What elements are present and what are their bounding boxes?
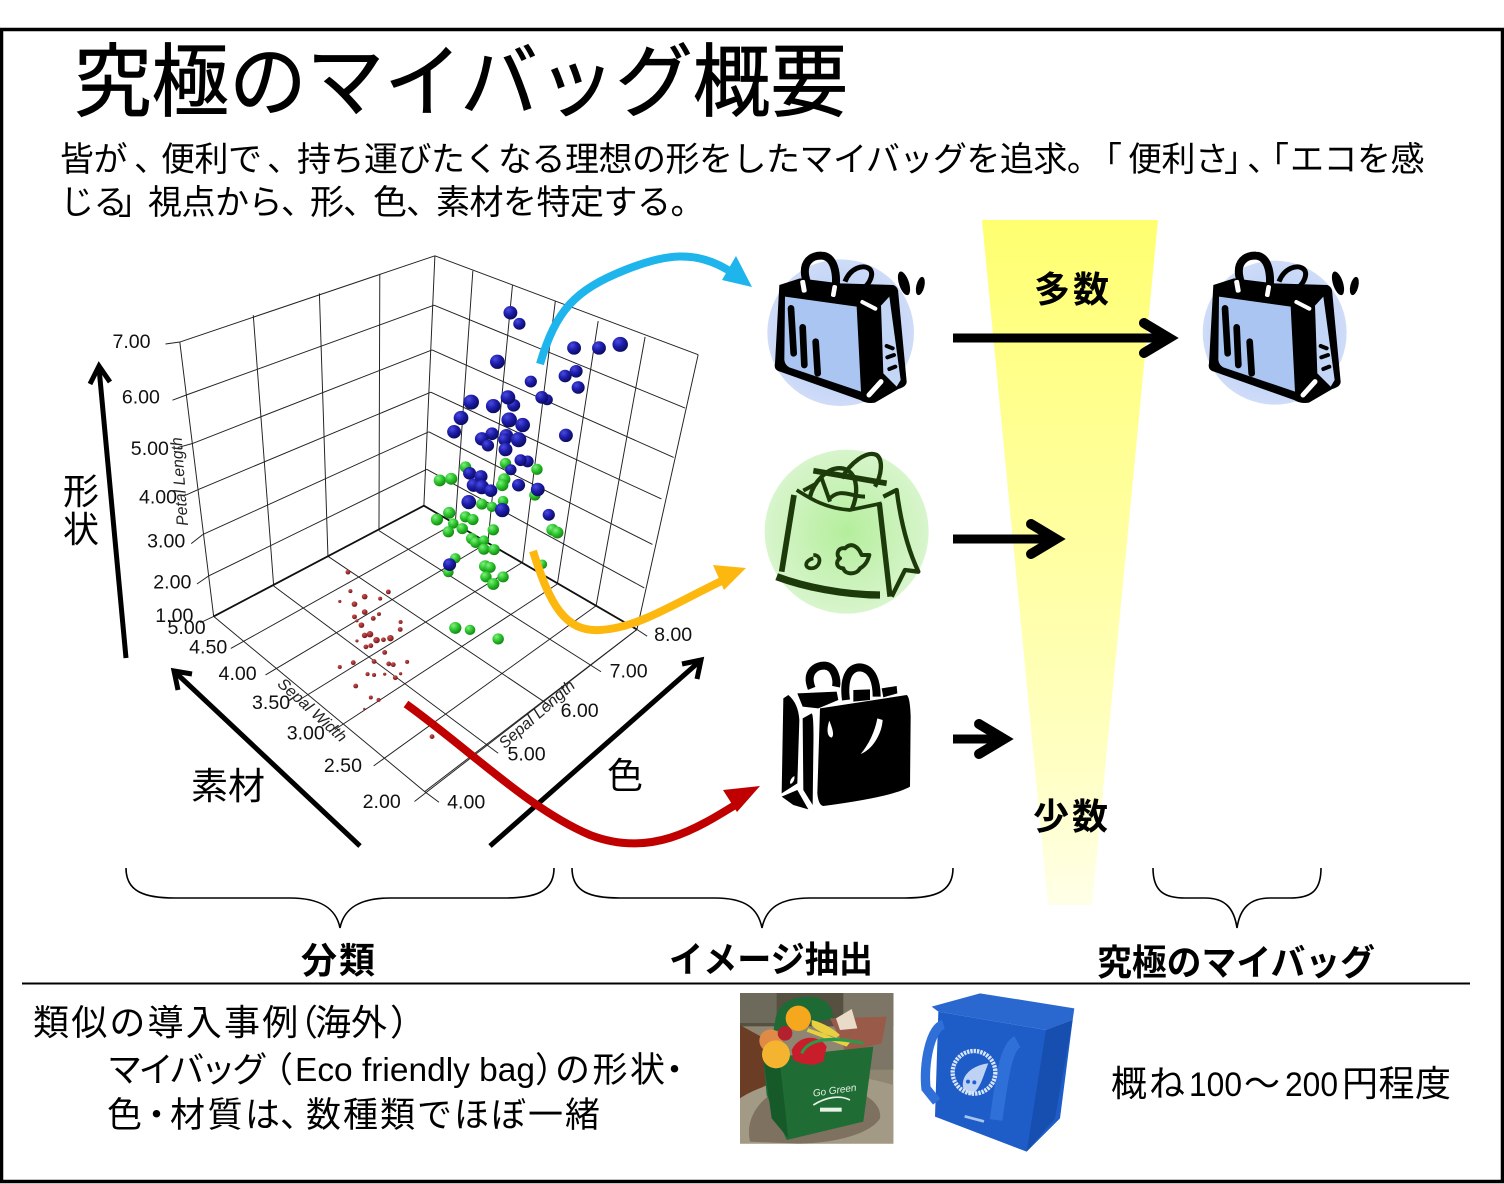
axis arrow: shape [90, 366, 126, 658]
photo: blue cooler bag [925, 993, 1074, 1152]
arrow: middle bag [953, 524, 1056, 554]
chart axis titles: Petal Length [167, 437, 192, 526]
chart tick labels: 4.00 [447, 793, 485, 814]
brace: ultimate bag [1153, 868, 1321, 928]
intro text: 、 [343, 184, 376, 222]
intro text: 便利で [161, 141, 262, 179]
intro text: 」 [1224, 141, 1258, 179]
intro text: 便利さ [1128, 141, 1228, 179]
title: 究極のマイバッグ概要 [74, 38, 848, 127]
overseas examples text: 数種類でほぼ一緒 [306, 1096, 602, 1135]
chart axis titles: Sepal Width [274, 675, 351, 746]
label: ultimate bag: 究極のマイバッグ [1097, 942, 1375, 983]
overseas examples text: （ [282, 1002, 318, 1043]
overseas examples text: 類似の導入事例 [33, 1002, 300, 1043]
overseas examples text: ・ [139, 1096, 174, 1135]
chart tick labels: 4.50 [189, 638, 227, 659]
brace: classification [126, 868, 554, 928]
chart tick labels: 6.00 [122, 388, 160, 409]
label: image extraction: イメージ抽出 [669, 939, 873, 980]
arrow: bottom bag [953, 724, 1004, 754]
intro text: 持ち運びたくなる理想の形をしたマイバッグを追求。 [297, 141, 1100, 179]
chart tick labels: 4.00 [139, 488, 177, 508]
chart tick labels: 2.00 [153, 573, 191, 593]
chart tick labels: 1.00 [155, 606, 193, 627]
chart axis titles: Sepal Length [495, 677, 579, 752]
intro text: 、 [1247, 141, 1280, 179]
chart tick labels: 3.50 [252, 693, 290, 714]
intro text: 色 [373, 184, 406, 222]
intro text: 視点から [148, 184, 282, 222]
intro text [60, 141, 1424, 222]
axis label: shape: 状 [63, 509, 99, 550]
chart tick labels: 7.00 [610, 662, 648, 682]
overseas examples text: 海外 [315, 1002, 387, 1043]
intro text: 形 [310, 184, 344, 222]
chart tick labels: 2.00 [363, 792, 401, 813]
funnel: many to few [982, 220, 1158, 905]
green points [431, 458, 563, 644]
chart grid [166, 256, 698, 802]
blue points [443, 306, 628, 571]
overseas examples text [33, 1002, 692, 1135]
intro text: 皆が [60, 141, 127, 179]
overseas examples text: ） [535, 1051, 570, 1090]
axis label: shape [63, 471, 99, 550]
label: classification: 分類 [301, 940, 375, 981]
chart tick labels [112, 332, 692, 814]
photo: green bag with groceries: Go Green [812, 1083, 858, 1100]
curved arrow: red [406, 704, 760, 843]
axis label: material: 素材 [191, 766, 265, 807]
divider [22, 982, 1470, 984]
chart tick labels: 4.00 [219, 664, 257, 685]
red points [338, 570, 434, 739]
label: few: 少数 [1033, 796, 1108, 837]
label: many: 多数 [1034, 269, 1109, 310]
price text: 200 [1285, 1066, 1338, 1104]
photo: green bag with groceries [740, 993, 893, 1144]
chart tick labels: 6.00 [561, 701, 599, 722]
chart tick labels: 5.00 [168, 618, 206, 639]
price text: 概ね [1111, 1063, 1187, 1104]
intro text: 、 [406, 184, 440, 222]
brace: image extraction [572, 868, 953, 928]
icon: final blue bag [1203, 256, 1360, 405]
icon: blue bag [767, 256, 926, 406]
intro text: 「 [1255, 141, 1288, 179]
arrow: top bag to final [953, 323, 1169, 353]
intro text: 「 [1088, 141, 1122, 179]
intro text: 、 [267, 141, 300, 179]
intro text: 、 [281, 184, 314, 222]
chart tick labels: 3.00 [287, 724, 325, 744]
chart tick labels: 5.00 [508, 745, 546, 765]
overseas examples text: 色 [107, 1096, 142, 1135]
overseas examples text: ・ [657, 1051, 692, 1090]
overseas examples text: 、 [280, 1096, 315, 1135]
chart tick labels: 5.00 [131, 439, 169, 460]
overseas examples text: マイバッグ [107, 1051, 266, 1090]
chart tick labels: 3.00 [147, 532, 185, 553]
intro text: 素材を特定する。 [436, 184, 704, 222]
chart tick labels: 2.50 [324, 756, 362, 777]
price text [1111, 1063, 1452, 1104]
curved arrow: blue [540, 256, 752, 364]
intro text: じる [60, 184, 127, 222]
icon: green bag [765, 450, 929, 614]
overseas examples text: Eco friendly bag [295, 1051, 535, 1088]
intro text: 」 [118, 184, 152, 222]
overseas examples text: の形状 [555, 1051, 668, 1090]
axis label: shape: 形 [63, 471, 99, 512]
axis label: colour: 色 [607, 755, 643, 796]
axis arrow: material [174, 671, 360, 846]
axis arrow: colour [490, 660, 701, 846]
overseas examples text: 材質は [170, 1096, 283, 1135]
chart tick labels: 8.00 [654, 625, 692, 646]
intro text: 、 [134, 141, 168, 179]
overseas examples text: （ [258, 1051, 293, 1090]
intro text: エコを感 [1290, 141, 1424, 179]
overseas examples text: ） [390, 1002, 426, 1043]
price text: ～ [1244, 1063, 1280, 1104]
3D scatter chart [112, 256, 698, 814]
price text: 100 [1189, 1066, 1242, 1104]
curved arrow: yellow [533, 551, 746, 630]
chart tick labels: 7.00 [112, 332, 151, 353]
chart axis titles [167, 437, 579, 752]
icon: black bag [782, 666, 911, 809]
price text: 円程度 [1342, 1063, 1452, 1104]
